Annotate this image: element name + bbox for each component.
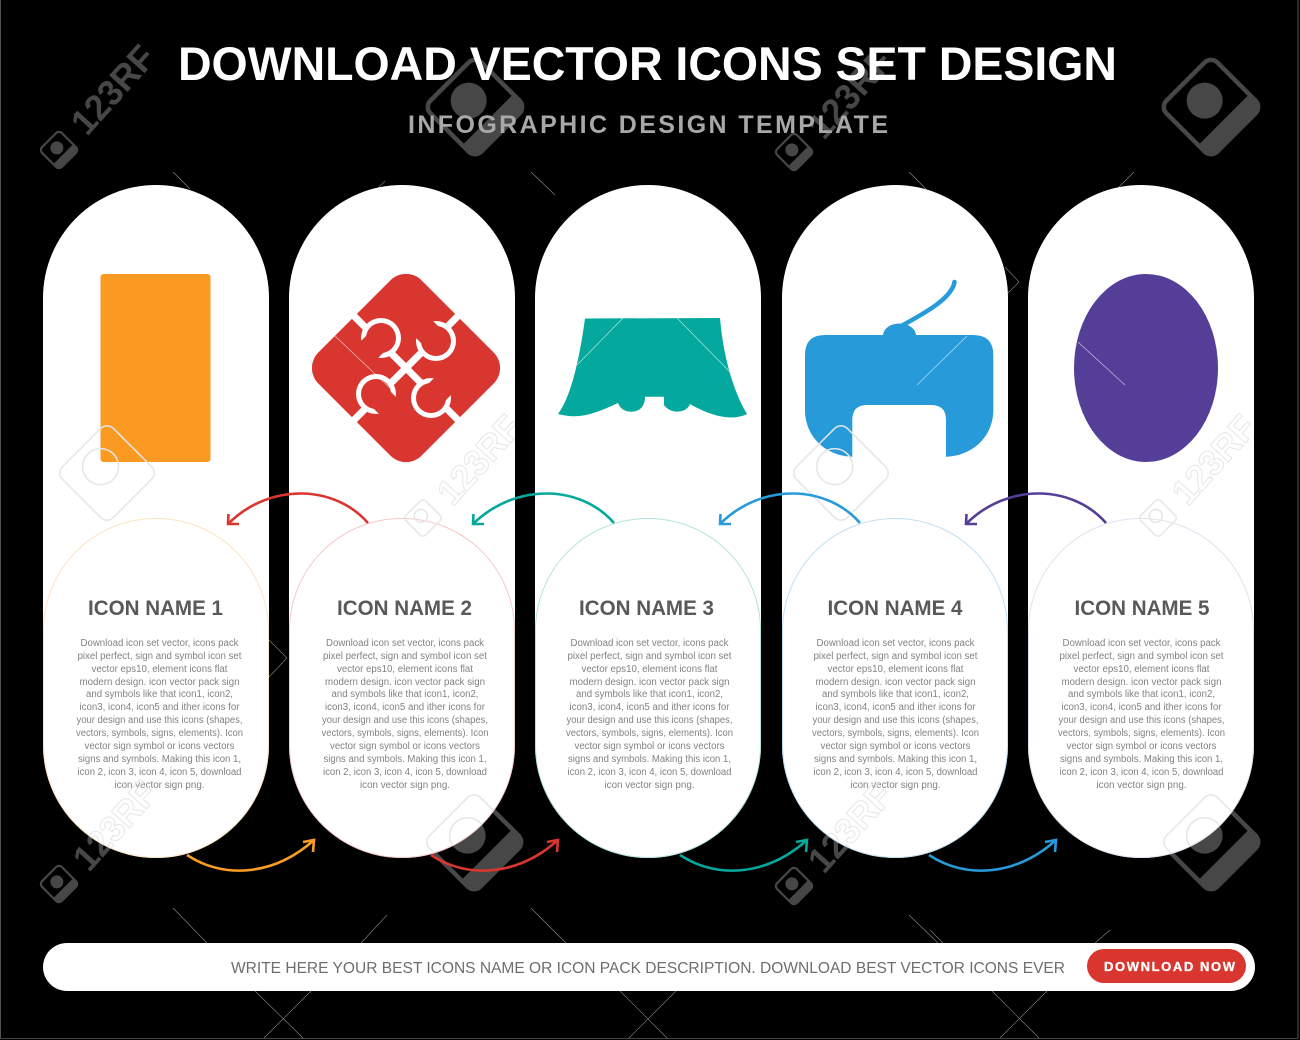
panel 1 description: vector sign symbol or icons vectors <box>84 741 234 752</box>
panel 2 description: vectors, symbols, signs, elements). Icon <box>322 728 488 739</box>
panel 2 description: icon vector sign png. <box>360 780 450 791</box>
panel 5 lower outline <box>1028 518 1254 858</box>
watermarks on panels <box>59 412 1251 854</box>
panel 2 lower outline <box>290 518 514 858</box>
panel 1 description: vectors, symbols, signs, elements). Icon <box>76 728 243 739</box>
watermarks on black: 123RF <box>64 773 165 878</box>
panel 1 description: your design and use this icons (shapes, <box>76 715 242 726</box>
panel 4 lower outline <box>782 518 1008 858</box>
panel 5 description: pixel perfect, sign and symbol icon set <box>1060 651 1224 662</box>
download button: DOWNLOAD NOW <box>1104 959 1236 974</box>
watermarks on panels: 123RF <box>1163 407 1264 512</box>
panel 3 description: icon3, icon4, icon5 and ither icons for <box>570 702 730 713</box>
panel 5 background <box>1028 185 1254 858</box>
footer description: WRITE HERE YOUR BEST ICONS NAME OR ICON PACK DESCRIPTION. DOWNLOAD BEST VECTOR ICONS EVER <box>231 960 1065 977</box>
panel 3 description: signs and symbols. Making this icon 1, <box>568 754 731 765</box>
panel 2 <box>289 185 515 858</box>
panel 1 background <box>43 185 269 858</box>
panel 4 description: signs and symbols. Making this icon 1, <box>814 754 977 765</box>
panel 5 heading: ICON NAME 5 <box>1074 597 1210 620</box>
panel 3 description: Download icon set vector, icons pack <box>570 638 729 649</box>
title: DOWNLOAD VECTOR ICONS SET DESIGN <box>178 37 1117 90</box>
panel 3 lower outline <box>536 518 760 858</box>
icon: orange rectangle <box>100 274 210 462</box>
watermarks on panels: 123RF <box>428 407 529 512</box>
panel 1 description: Download icon set vector, icons pack <box>80 638 239 649</box>
panel 3 description: pixel perfect, sign and symbol icon set <box>568 651 732 662</box>
panel 4 description: vectors, symbols, signs, elements). Icon <box>812 728 979 739</box>
icon: teal skirt <box>558 318 747 417</box>
arrow: blue bottom <box>929 840 1056 871</box>
panel 3 description <box>566 638 733 791</box>
panel 1 <box>43 185 269 858</box>
panel 4 description: and symbols like that icon1, icon2, <box>822 689 969 700</box>
panel 5 description: vector sign symbol or icons vectors <box>1066 741 1216 752</box>
subtitle: INFOGRAPHIC DESIGN TEMPLATE <box>408 111 888 139</box>
panel 5 description: and symbols like that icon1, icon2, <box>1068 689 1215 700</box>
panel 1 description: pixel perfect, sign and symbol icon set <box>78 651 242 662</box>
panel 4 description: vector eps10, element icons flat <box>828 664 964 675</box>
panel 2 description: vector eps10, element icons flat <box>337 664 473 675</box>
panel 1 heading: ICON NAME 1 <box>88 597 223 620</box>
panel 5 description: icon vector sign png. <box>1096 780 1186 791</box>
panel 1 description: modern design. icon vector pack sign <box>80 677 240 688</box>
panel 5 description: vectors, symbols, signs, elements). Icon <box>1058 728 1225 739</box>
panel 2 description: modern design. icon vector pack sign <box>325 677 485 688</box>
panel 2 description: Download icon set vector, icons pack <box>326 638 485 649</box>
panel 4 description: Download icon set vector, icons pack <box>816 638 975 649</box>
panel 3 description: vector eps10, element icons flat <box>582 664 718 675</box>
panel 4 background <box>782 185 1008 858</box>
panel 2 description: vector sign symbol or icons vectors <box>330 741 480 752</box>
panel 5 <box>1028 185 1254 858</box>
panel 1 description: icon3, icon4, icon5 and ither icons for <box>80 702 240 713</box>
panel 3 description: modern design. icon vector pack sign <box>570 677 730 688</box>
panel 5 description: your design and use this icons (shapes, <box>1058 715 1224 726</box>
panel 2 heading: ICON NAME 2 <box>337 597 472 620</box>
panel 4 description <box>812 638 979 791</box>
watermarks on panels: 123RF <box>799 775 900 880</box>
footer bar <box>43 943 1255 991</box>
panel 5 description <box>1058 638 1225 791</box>
panel 3 <box>535 185 761 858</box>
panel 2 background <box>289 185 515 858</box>
icon: purple oval <box>1074 274 1218 462</box>
panel 3 background <box>535 185 761 858</box>
panel 4 description: icon3, icon4, icon5 and ither icons for <box>816 702 976 713</box>
watermarks on black <box>39 37 1262 906</box>
panel 4 description: icon vector sign png. <box>850 780 940 791</box>
panel 2 description <box>322 638 488 791</box>
arrow: blue top <box>720 493 860 524</box>
panel 4 description: pixel perfect, sign and symbol icon set <box>814 651 978 662</box>
panel 2 description: your design and use this icons (shapes, <box>322 715 488 726</box>
arrow: teal bottom <box>680 840 807 871</box>
watermarks on black: 123RF <box>799 41 900 146</box>
panel 2 description: signs and symbols. Making this icon 1, <box>324 754 486 765</box>
watermarks on black: 123RF <box>799 775 900 880</box>
panel 2 description: pixel perfect, sign and symbol icon set <box>323 651 487 662</box>
panel 4 description: icon 2, icon 3, icon 4, icon 5, download <box>814 767 978 778</box>
panel 4 <box>782 185 1008 858</box>
panel 1 description: signs and symbols. Making this icon 1, <box>78 754 241 765</box>
panel 4 description: modern design. icon vector pack sign <box>816 677 976 688</box>
panel 5 description: signs and symbols. Making this icon 1, <box>1060 754 1223 765</box>
panel 3 description: and symbols like that icon1, icon2, <box>576 689 723 700</box>
watermarks on panels: 123RF <box>64 773 165 878</box>
icon: puzzle diamond <box>303 265 509 471</box>
panel 3 description: your design and use this icons (shapes, <box>566 715 732 726</box>
panel 3 heading: ICON NAME 3 <box>579 597 714 620</box>
panel 1 description: icon 2, icon 3, icon 4, icon 5, download <box>78 767 242 778</box>
download button <box>1087 949 1246 983</box>
panel 3 description: icon vector sign png. <box>604 780 694 791</box>
arrow: red top <box>228 493 368 524</box>
panel 2 description: icon3, icon4, icon5 and ither icons for <box>325 702 486 713</box>
panel 5 description: icon3, icon4, icon5 and ither icons for <box>1062 702 1222 713</box>
arrow: red bottom <box>431 840 558 871</box>
panel 1 description <box>76 638 243 791</box>
panel 5 description: vector eps10, element icons flat <box>1074 664 1210 675</box>
panel 4 description: your design and use this icons (shapes, <box>812 715 978 726</box>
panel 1 lower outline <box>44 518 268 858</box>
panel 1 description: and symbols like that icon1, icon2, <box>86 689 233 700</box>
panel 3 description: vector sign symbol or icons vectors <box>574 741 724 752</box>
panel 4 description: vector sign symbol or icons vectors <box>820 741 970 752</box>
panel 1 description: vector eps10, element icons flat <box>92 664 228 675</box>
panel 3 description: icon 2, icon 3, icon 4, icon 5, download <box>568 767 732 778</box>
panel 2 description: and symbols like that icon1, icon2, <box>332 689 478 700</box>
panel 3 description: vectors, symbols, signs, elements). Icon <box>566 728 733 739</box>
panel 4 heading: ICON NAME 4 <box>828 597 963 620</box>
icon: blue gamepad <box>805 282 993 457</box>
arrow: purple top <box>966 493 1106 524</box>
watermarks on black: 123RF <box>62 37 163 142</box>
panel 5 description: modern design. icon vector pack sign <box>1062 677 1222 688</box>
panel 2 description: icon 2, icon 3, icon 4, icon 5, download <box>323 767 487 778</box>
panel 1 description: icon vector sign png. <box>114 780 204 791</box>
panel 5 description: Download icon set vector, icons pack <box>1062 638 1221 649</box>
arrow: orange bottom <box>187 840 314 871</box>
panel 5 description: icon 2, icon 3, icon 4, icon 5, download <box>1060 767 1224 778</box>
arrow: teal top <box>473 493 614 524</box>
